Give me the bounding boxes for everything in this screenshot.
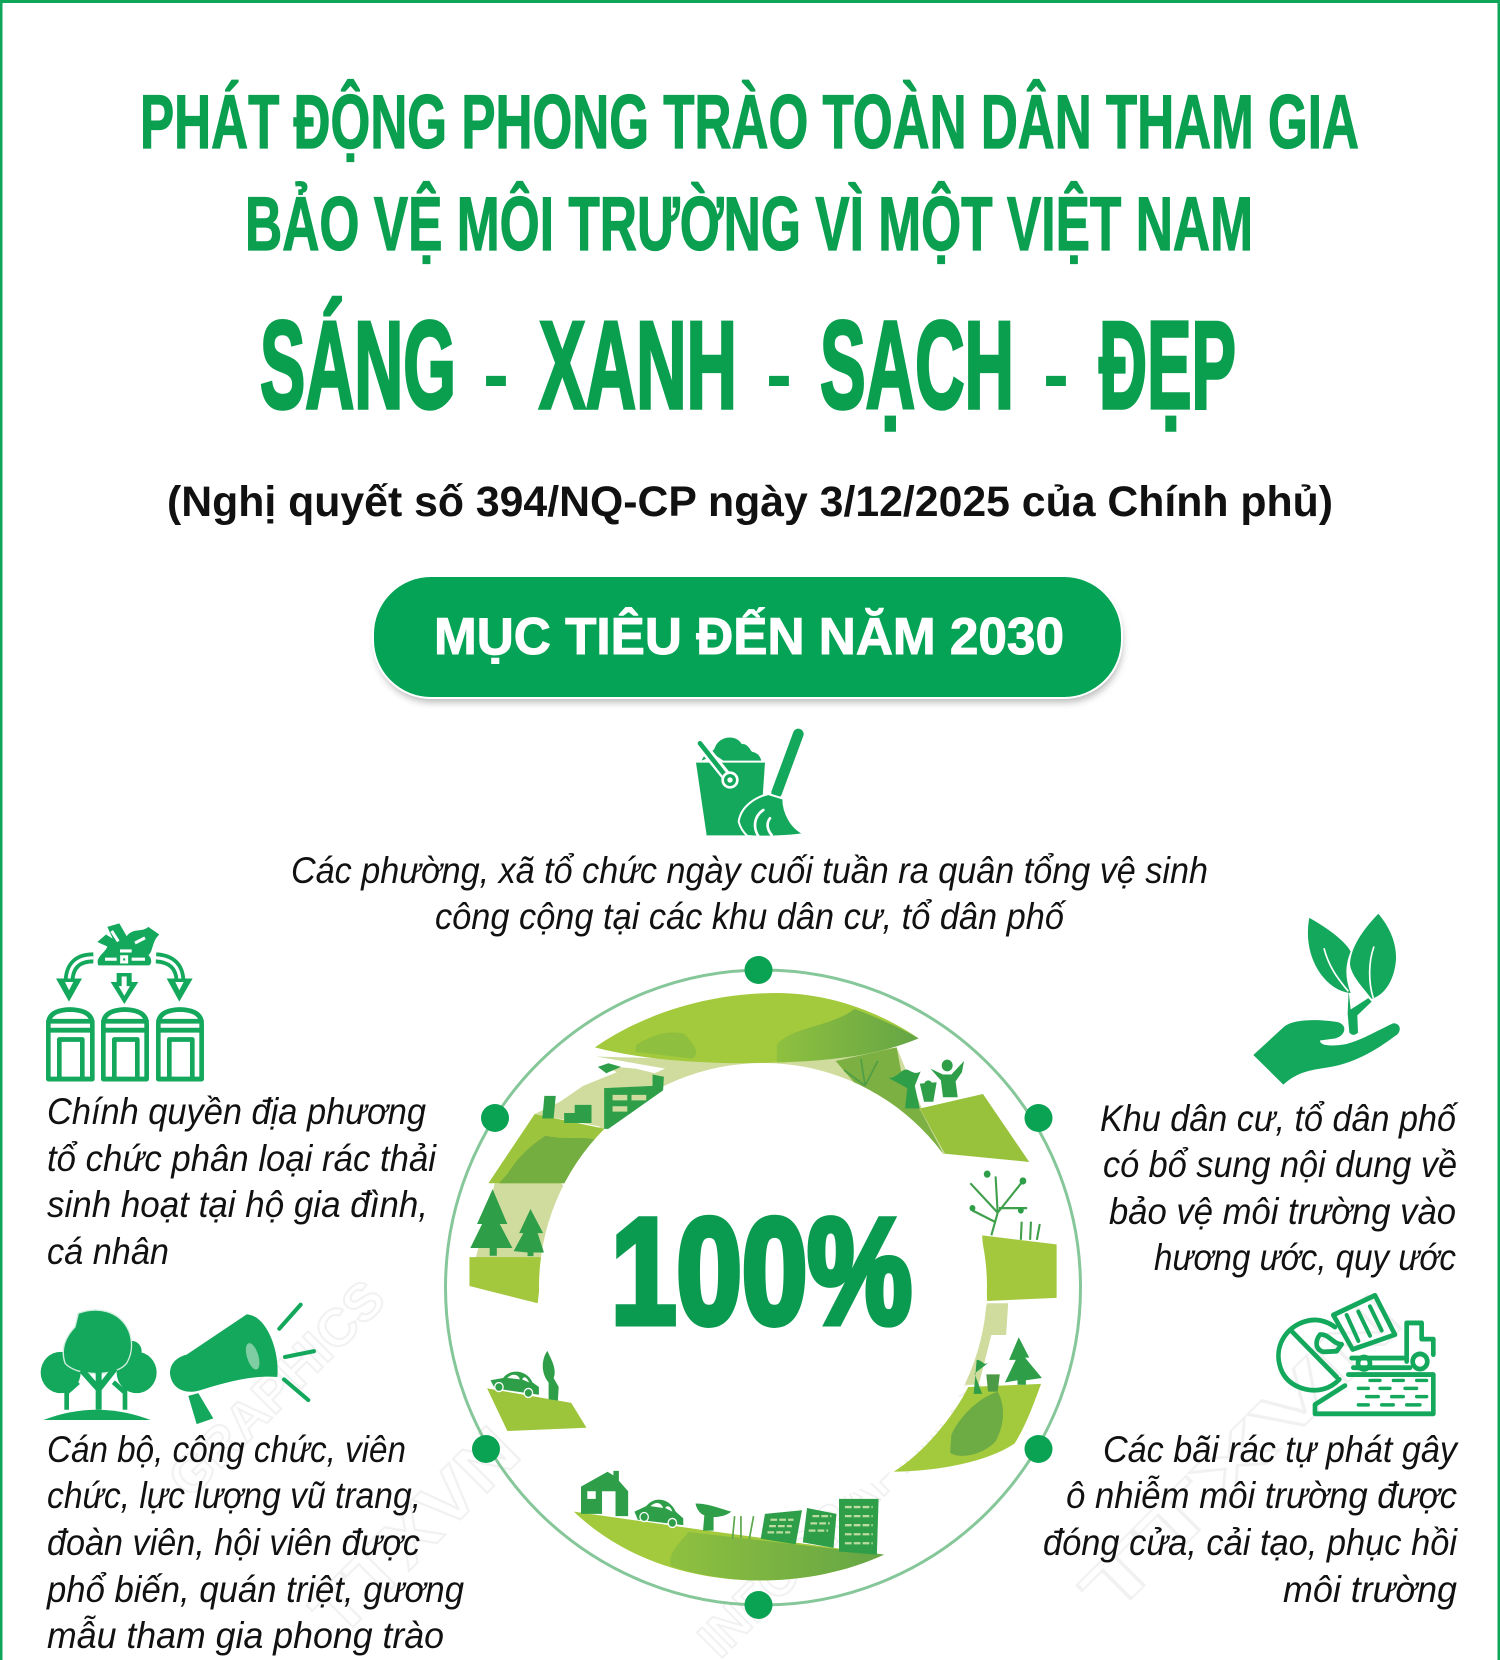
text: waste sorting: Chính quyền địa phương (47, 1091, 426, 1132)
text: village rules: bảo vệ môi trường vào (1109, 1191, 1456, 1232)
slogan: - (1043, 327, 1069, 421)
goal banner: MỤC TIÊU ĐẾN NĂM 2030 (434, 607, 1064, 666)
white centre disc (539, 1063, 987, 1511)
upper right green block (920, 1094, 1029, 1162)
slogan: - (766, 327, 792, 421)
icon: trees and megaphone (41, 1305, 314, 1424)
text: weekend cleaning: công cộng tại các khu dân cư, tổ dân phố (435, 896, 1067, 937)
bottom right arc (962, 1303, 1008, 1385)
watermark (157, 1269, 1418, 1660)
bottom arc (574, 1512, 884, 1580)
people (888, 1070, 921, 1109)
watermark: TTXVN (1065, 1278, 1418, 1631)
globe illustration (469, 993, 1057, 1580)
text: village rules: hương ước, quy ước (1154, 1237, 1456, 1278)
dark band right (836, 1047, 943, 1153)
text: weekend cleaning (291, 850, 1208, 937)
roadside tree (543, 1351, 559, 1401)
text: illegal dumps: đóng cửa, cải tạo, phục hồi (1043, 1522, 1459, 1563)
slogan: ĐẸP (1099, 297, 1236, 435)
text: officials: Cán bộ, công chức, viên (47, 1429, 406, 1470)
icon: bucket and broom (696, 734, 805, 837)
text: officials: phổ biến, quán triệt, gương (46, 1569, 464, 1610)
globe icons (470, 1059, 1042, 1555)
slogan: XANH (539, 297, 737, 435)
text: weekend cleaning: Các phường, xã tổ chức ngày cuối tuần ra quân tổng vệ sinh (291, 850, 1208, 891)
text: officials (46, 1429, 464, 1656)
text: officials: đoàn viên, hội viên được (47, 1522, 420, 1563)
slogan (260, 297, 1236, 435)
pine tree right (1005, 1337, 1042, 1385)
text: village rules: có bổ sung nội dung về (1103, 1144, 1457, 1185)
text: waste sorting: sinh hoạt tại hộ gia đình, (47, 1184, 428, 1225)
icon: closing landfill (1278, 1295, 1433, 1414)
text: waste sorting: cá nhân (47, 1231, 169, 1272)
watermark: INFOGRAPHICS (687, 1359, 997, 1660)
truck (564, 1105, 592, 1123)
100%: 100% (611, 1187, 912, 1355)
house (581, 1471, 628, 1516)
office block (604, 1075, 664, 1129)
left lower green block (469, 1257, 543, 1303)
tan land (476, 1047, 945, 1258)
car patch (487, 1388, 586, 1431)
bare tree (970, 1176, 1027, 1235)
subtitle: (Nghị quyết số 394/NQ-CP ngày 3/12/2025 của Chính phủ) (167, 478, 1333, 526)
car bottom (634, 1500, 683, 1527)
white cloud patches (583, 1055, 665, 1082)
gas pump (542, 1096, 556, 1118)
slogan: - (483, 327, 509, 421)
text: officials: mẫu tham gia phong trào (47, 1615, 444, 1656)
text: village rules: Khu dân cư, tổ dân phố (1100, 1098, 1459, 1139)
text: officials: chức, lực lượng vũ trang, (47, 1475, 421, 1516)
icon: waste sorting (48, 923, 202, 1079)
car left (491, 1372, 539, 1397)
plane (598, 1063, 621, 1073)
upper left green block (488, 1114, 605, 1183)
text: illegal dumps: ô nhiễm môi trường được (1066, 1475, 1457, 1516)
text: illegal dumps (1043, 1429, 1459, 1610)
text: illegal dumps: Các bãi rác tự phát gây (1103, 1429, 1459, 1470)
buildings (761, 1510, 802, 1544)
slogan: SÁNG (260, 297, 456, 435)
goal banner (373, 576, 1122, 702)
right green block (982, 1235, 1057, 1301)
dark land on cap (777, 1009, 919, 1062)
watermark: GRAPHICS (157, 1269, 396, 1508)
flowers right (1021, 1222, 1040, 1240)
flowers (733, 1516, 754, 1539)
person with bin (974, 1360, 989, 1394)
flat tree (695, 1503, 731, 1531)
text: village rules (1100, 1098, 1459, 1278)
text: illegal dumps: môi trường (1283, 1569, 1457, 1610)
icon: hand holding sprout (1253, 914, 1400, 1085)
text: waste sorting (47, 1091, 438, 1272)
pine trees (470, 1189, 512, 1256)
slogan: SẠCH (820, 297, 1014, 435)
circular ring with dots (446, 956, 1080, 1619)
plant (844, 1059, 878, 1086)
top cap (595, 993, 919, 1063)
watermark: TTXVN (295, 1412, 534, 1651)
text: waste sorting: tổ chức phân loại rác thải (47, 1138, 438, 1179)
